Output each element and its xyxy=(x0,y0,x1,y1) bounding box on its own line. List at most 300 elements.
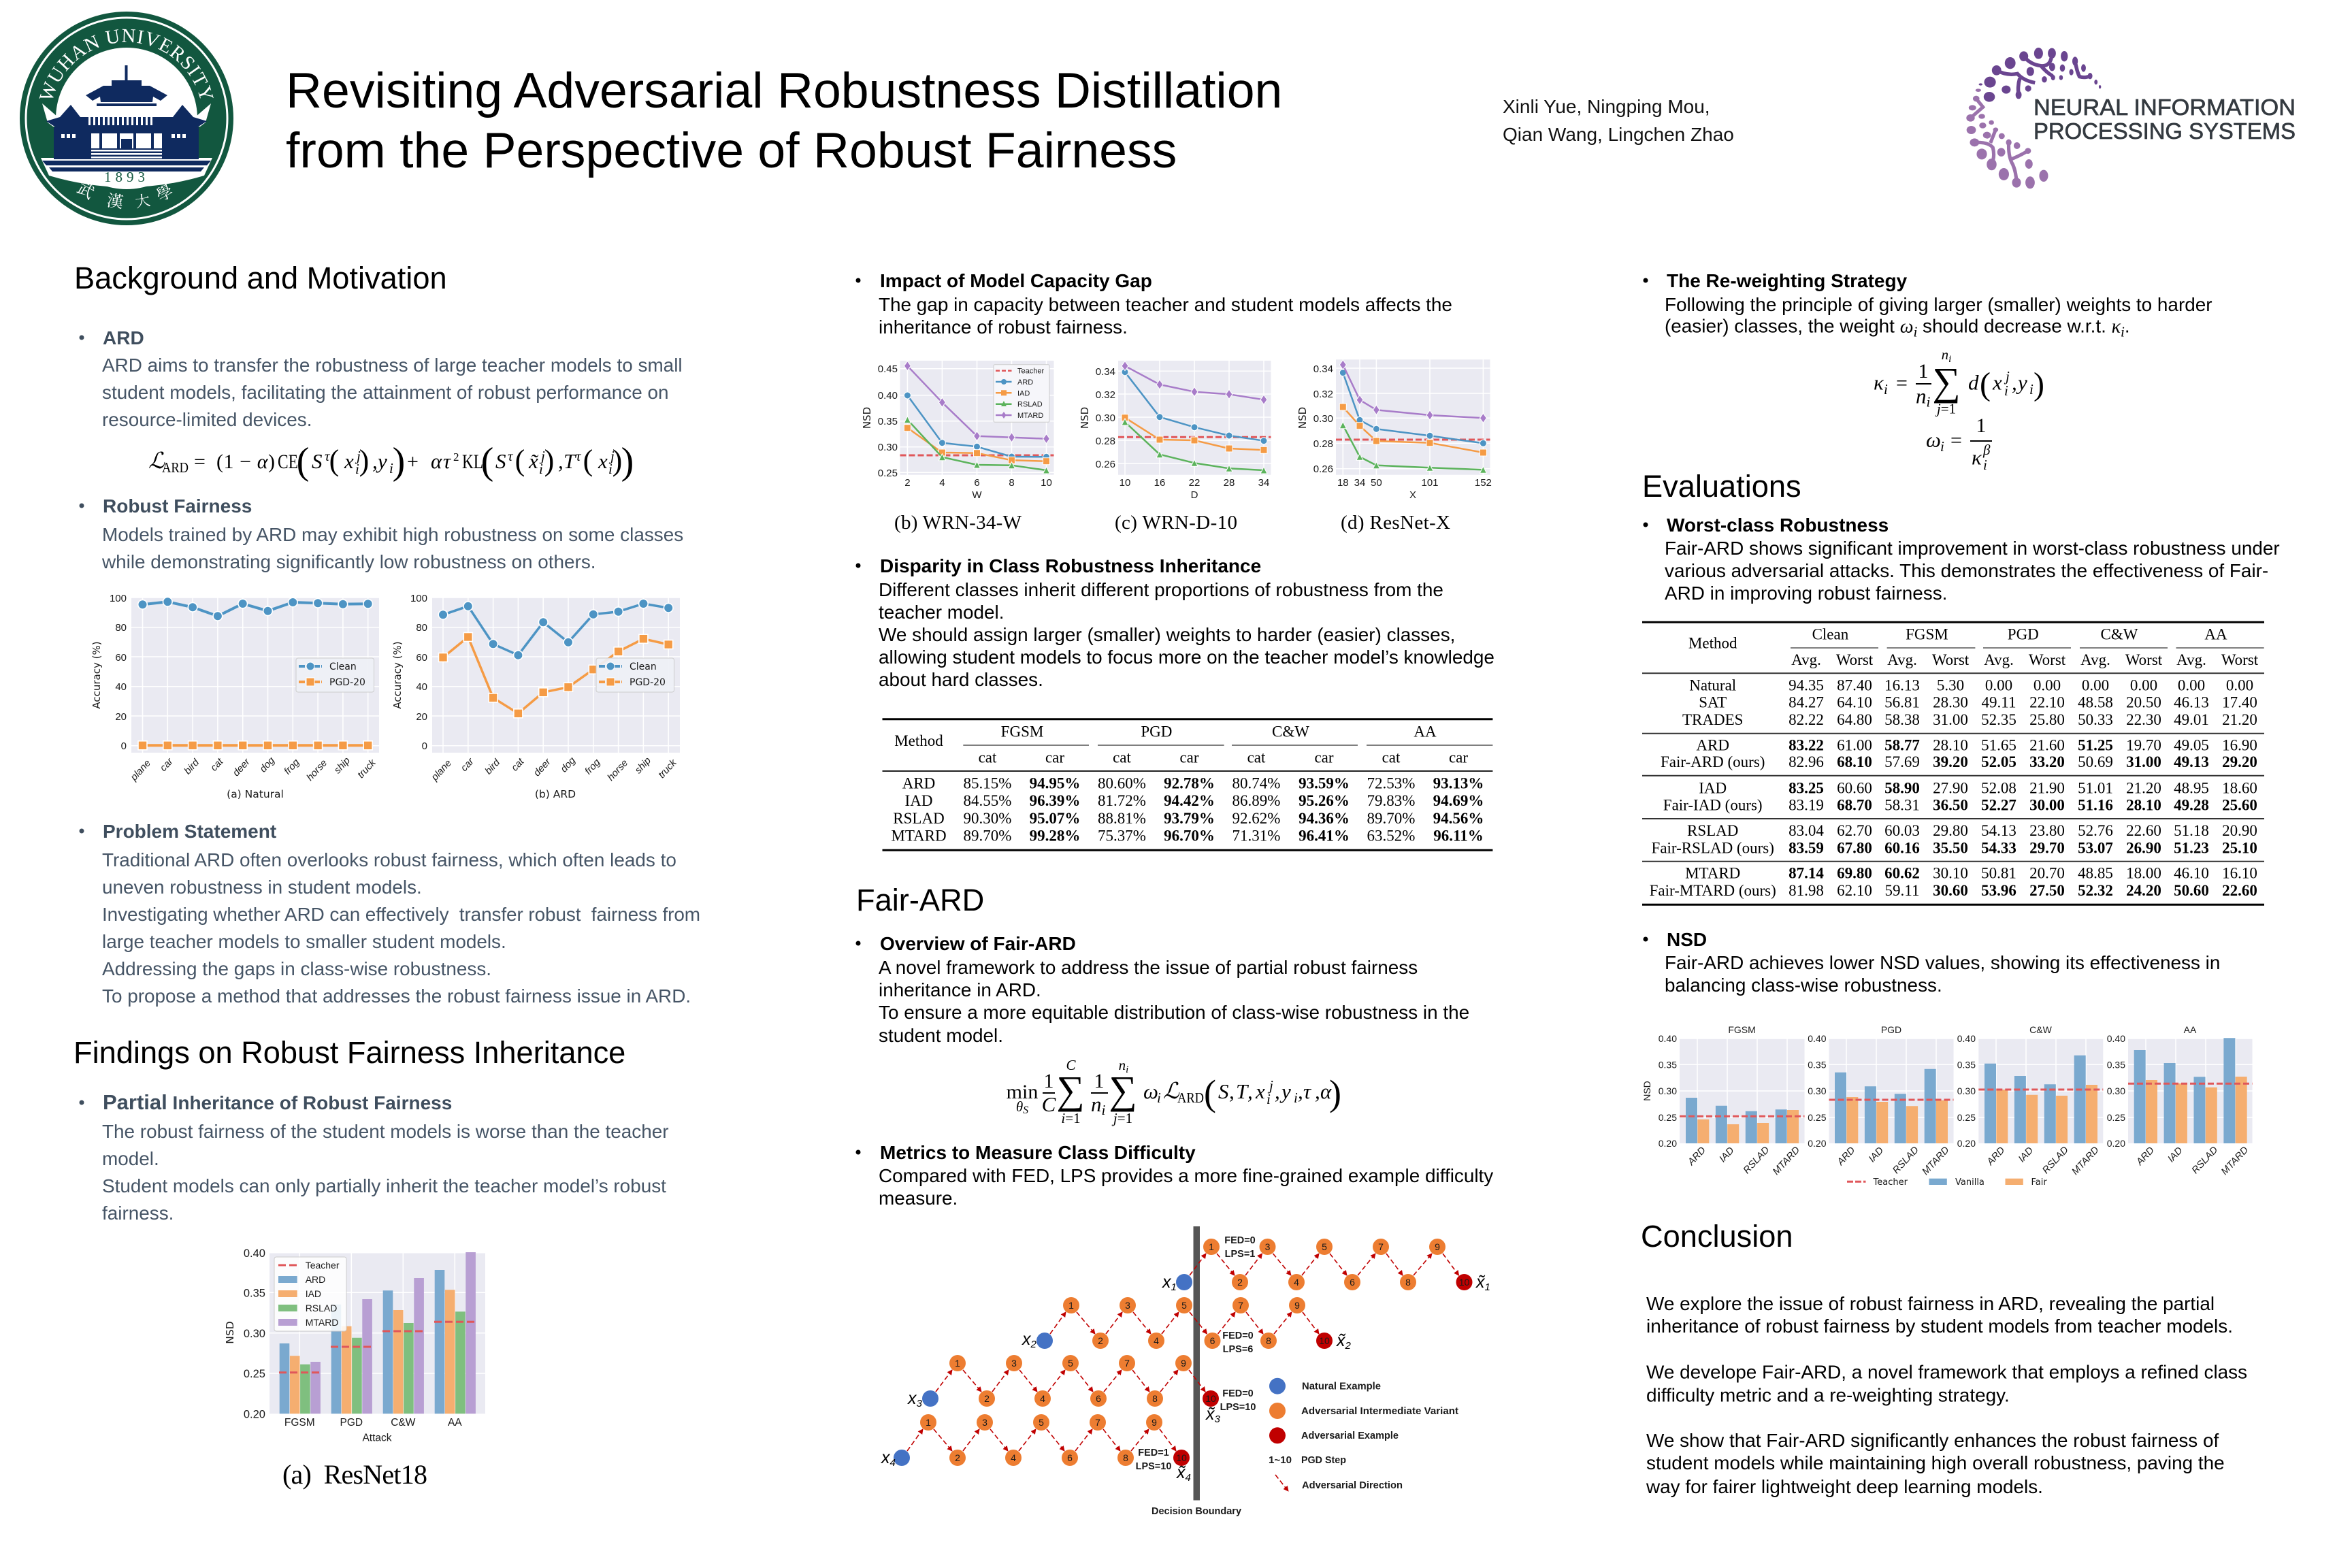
line chart: WRN-34-W: Teacher xyxy=(1017,368,1044,376)
table: worst-class robustness comparison: 64.10 xyxy=(1837,693,1872,710)
table: class-wise robustness inheritance: 95.07% xyxy=(1030,810,1080,827)
table: worst-class robustness comparison: 56.81 xyxy=(1884,693,1920,710)
table: worst-class robustness comparison: 20.70 xyxy=(2029,865,2065,882)
example variable labels: x̃ xyxy=(1337,1331,1345,1350)
table: class-wise robustness inheritance: 94.95% xyxy=(1030,774,1080,791)
tick labels and titles: FGSM xyxy=(1728,1024,1756,1035)
formula: Fair-ARD objective: T xyxy=(1236,1079,1250,1103)
formula: ARD loss: ( xyxy=(481,440,493,483)
logo: Wuhan University seal: 漢 xyxy=(105,187,125,213)
tick labels and titles: RSLAD xyxy=(2190,1145,2220,1176)
tick labels and titles: 0.40 xyxy=(1808,1033,1827,1044)
formula: ARD loss: x xyxy=(598,449,608,473)
line chart: WRN-34-W: 0.45 xyxy=(878,363,898,375)
table: worst-class robustness comparison: 5.30 xyxy=(1937,676,1964,693)
table: worst-class robustness comparison: 82.96 xyxy=(1788,753,1824,770)
formula: kappa and omega: i xyxy=(1948,354,1951,365)
logo: Wuhan University seal: 大 xyxy=(133,189,152,212)
table: worst-class robustness comparison: Fair-IAD (ours) xyxy=(1663,796,1763,813)
block: problem statement: Problem Statement xyxy=(103,821,276,842)
FED and LPS annotations: LPS=10 xyxy=(1136,1461,1171,1472)
table: worst-class robustness comparison: 46.10 xyxy=(2174,865,2209,882)
table: class-wise robustness inheritance: 92.78% xyxy=(1164,774,1215,791)
formula: kappa and omega: , xyxy=(2012,371,2017,395)
line chart: ResNet-X: 0.26 xyxy=(1313,463,1333,475)
step numbers: 4 xyxy=(1040,1393,1045,1404)
bar chart: NSD on ResNet18: C&W xyxy=(391,1417,416,1428)
tick labels and titles: 0.20 xyxy=(2107,1138,2125,1149)
line chart: natural model per-class accuracy: (a) Natural xyxy=(227,788,284,800)
decision boundary label: Decision Boundary xyxy=(1152,1506,1241,1517)
block: disparity text: teacher model. xyxy=(879,602,1004,623)
formula: ARD loss: i xyxy=(608,461,612,477)
block: robust fairness: Robust Fairness xyxy=(103,495,252,517)
tick labels and titles: AA xyxy=(2184,1024,2197,1035)
step numbers: 1 xyxy=(926,1417,931,1428)
example variable labels: x xyxy=(908,1389,916,1408)
decision boundary xyxy=(1194,1226,1200,1500)
step numbers: 2 xyxy=(955,1452,960,1463)
table: worst-class robustness comparison: ARD xyxy=(1696,736,1729,753)
block: overview of Fair-ARD: inheritance in ARD. xyxy=(879,979,1041,1000)
line chart: natural model per-class accuracy: 20 xyxy=(115,711,127,723)
line chart: ResNet-X: 0.28 xyxy=(1313,438,1333,450)
heading: findings: Findings on Robust Fairness Inheritance xyxy=(74,1035,625,1070)
table: class-wise robustness inheritance: C&W xyxy=(1272,723,1309,740)
example variable labels xyxy=(881,1273,1490,1484)
fair bars xyxy=(1697,1077,2247,1143)
tick labels and titles: NSD xyxy=(1642,1081,1652,1101)
table: worst-class robustness comparison: 25.60 xyxy=(2222,796,2257,813)
line chart: ARD model per-class accuracy: bird xyxy=(483,757,503,777)
table: class-wise robustness inheritance: 75.37% xyxy=(1098,828,1146,845)
block: re-weighting text: (easier) classes, the weight ω xyxy=(1665,316,1913,338)
table: worst-class robustness comparison: 33.20 xyxy=(2029,753,2065,770)
formula: Fair-ARD objective: i=1 xyxy=(1061,1110,1081,1126)
block: re-weighting text: The Re-weighting Strategy xyxy=(1667,270,1908,291)
step numbers: 7 xyxy=(1238,1300,1243,1311)
step numbers: 10 xyxy=(1205,1393,1216,1404)
table: worst-class robustness comparison: RSLAD xyxy=(1687,822,1738,839)
title xyxy=(286,63,1282,178)
formula: kappa and omega: j xyxy=(2004,368,2010,385)
table: worst-class robustness comparison: 69.80 xyxy=(1837,865,1872,882)
table: worst-class robustness comparison: 48.58 xyxy=(2078,693,2113,710)
line chart: WRN-D-10: NSD xyxy=(1079,407,1091,429)
line chart: natural model per-class accuracy: 40 xyxy=(115,681,127,693)
line chart: WRN-34-W: 2 xyxy=(904,477,911,489)
table: worst-class robustness comparison: 49.11 xyxy=(1982,693,2016,710)
bar chart: NSD on ResNet18: FGSM xyxy=(284,1417,315,1428)
formula: ARD loss: ) xyxy=(612,444,622,477)
table: worst-class robustness comparison: 0.00 xyxy=(2226,676,2253,693)
table: worst-class robustness comparison: 28.10 xyxy=(2126,796,2161,813)
table: class-wise robustness inheritance: MTARD xyxy=(891,828,947,845)
example variable labels: 4 xyxy=(890,1457,896,1469)
table: worst-class robustness comparison: 16.10 xyxy=(2222,865,2257,882)
step numbers: 10 xyxy=(1176,1452,1187,1463)
formula: kappa and omega: ∑ xyxy=(1932,359,1961,404)
panel: conclusion xyxy=(1641,1219,2247,1497)
line chart: ARD model per-class accuracy: Clean xyxy=(630,662,657,672)
example variable labels: 2 xyxy=(1030,1339,1037,1350)
logo: Wuhan University seal: 武 xyxy=(74,175,99,203)
line chart: ResNet-X: 0.30 xyxy=(1313,413,1333,425)
tick labels and titles: IAD xyxy=(1717,1145,1737,1164)
table: class-wise robustness inheritance: 99.28% xyxy=(1030,828,1080,845)
table: worst-class robustness comparison: 21.20 xyxy=(2126,779,2161,796)
text: conclusion point one: We explore the issue of robust fairness in ARD, revealing the partial xyxy=(1646,1293,2215,1314)
line chart: WRN-34-W: NSD xyxy=(861,407,873,429)
table: worst-class robustness comparison: 20.50 xyxy=(2126,693,2161,710)
table: worst-class robustness comparison: 39.20 xyxy=(1933,753,1968,770)
tick labels and titles: 0.25 xyxy=(1659,1112,1677,1123)
bar chart: NSD on ResNet18: ARD xyxy=(306,1274,325,1285)
authors: Qian Wang, Lingchen Zhao xyxy=(1503,124,1734,145)
formula: kappa and omega: i xyxy=(2029,381,2034,397)
table: worst-class robustness comparison: Avg. xyxy=(1791,651,1821,668)
formula: ARD loss: ) xyxy=(393,440,405,483)
formula: ARD loss: , xyxy=(372,449,378,473)
formula: ARD loss: (1 − α) xyxy=(216,451,275,473)
heading: Fair-ARD: Fair-ARD xyxy=(856,883,984,917)
table: worst-class robustness comparison: Worst xyxy=(2125,651,2163,668)
block: re-weighting text xyxy=(1643,270,2212,340)
panel: fair-ARD xyxy=(856,883,1493,1517)
line chart: WRN-34-W: 8 xyxy=(1009,477,1015,489)
FED and LPS annotations: FED=0 xyxy=(1224,1235,1256,1246)
table: class-wise robustness inheritance: 79.83% xyxy=(1367,792,1415,809)
table: worst-class robustness comparison: 0.00 xyxy=(2178,676,2205,693)
table: worst-class robustness comparison: 82.22 xyxy=(1788,711,1824,728)
line chart: ARD model per-class accuracy: 80 xyxy=(416,622,427,634)
formula: Fair-ARD objective: n xyxy=(1119,1057,1126,1073)
step numbers: 6 xyxy=(1096,1393,1101,1404)
diagram legend: Natural Example xyxy=(1302,1382,1381,1392)
tick labels and titles: MTARD xyxy=(2070,1145,2102,1177)
example variable labels: 4 xyxy=(1186,1472,1191,1484)
step numbers: 4 xyxy=(1154,1335,1159,1346)
formula: Fair-ARD objective: j=1 xyxy=(1111,1110,1132,1126)
table: class-wise robustness inheritance: 89.70% xyxy=(964,828,1011,845)
tick labels and titles: C&W xyxy=(2029,1024,2053,1035)
step numbers: 8 xyxy=(1152,1393,1158,1404)
table: worst-class robustness comparison: SAT xyxy=(1699,693,1727,710)
formula: kappa and omega: 1 xyxy=(1918,360,1929,382)
logo: Wuhan University seal: 學 xyxy=(151,178,177,206)
line chart: ResNet-X: 18 xyxy=(1337,477,1349,489)
formula: kappa and omega: ( xyxy=(1980,366,1991,402)
step numbers: 2 xyxy=(984,1393,990,1404)
text: conclusion point three: way for fairer lightweight deep learning models. xyxy=(1646,1476,2043,1497)
text: conclusion point three: We show that Fair-ARD significantly enhances the robust fairness of xyxy=(1646,1430,2219,1451)
block: disparity text: We should assign larger (smaller) weights to harder (easier) classes, xyxy=(879,624,1455,645)
formula: ARD loss: τ xyxy=(576,448,582,464)
block: re-weighting text: should decrease w.r.t. xyxy=(1917,316,2112,336)
tick labels and titles: 0.25 xyxy=(1808,1112,1827,1123)
block: ARD: ARD aims to transfer the robustness of large teacher models to small xyxy=(102,355,683,376)
block: worst-class robustness: ARD in improving robust fairness. xyxy=(1665,583,1947,604)
line chart: natural model per-class accuracy: ship xyxy=(332,755,353,776)
formula: Fair-ARD objective: C xyxy=(1066,1057,1076,1073)
line chart: WRN-34-W: RSLAD xyxy=(1017,401,1043,409)
table: worst-class robustness comparison: 54.13 xyxy=(1981,822,2016,839)
formula: ARD loss: ( xyxy=(515,444,525,477)
block: re-weighting text: κ xyxy=(2112,316,2121,338)
text: conclusion point two: difficulty metric and a re-weighting strategy. xyxy=(1646,1384,2010,1406)
formula: Fair-ARD objective: j xyxy=(1267,1077,1273,1094)
table: worst-class robustness comparison: 31.00 xyxy=(1933,711,1968,728)
block: partial inheritance: Partial Inheritance of Robust Fairness xyxy=(103,1090,452,1114)
bar chart: NSD on ResNet18: 0.35 xyxy=(244,1288,265,1300)
line chart: natural model per-class accuracy: plane xyxy=(128,758,153,783)
line chart: ARD model per-class accuracy: Accuracy (%) xyxy=(391,641,404,709)
bar chart: NSD on ResNet18: RSLAD xyxy=(306,1303,337,1313)
tick labels and titles: 0.20 xyxy=(1808,1138,1827,1149)
table: worst-class robustness comparison: 30.00 xyxy=(2029,796,2065,813)
formula: Fair-ARD objective: i xyxy=(1267,1091,1271,1107)
example variable labels: 1 xyxy=(1171,1281,1177,1293)
table: worst-class robustness comparison: 0.00 xyxy=(2034,676,2061,693)
formula: Fair-ARD objective: ω xyxy=(1143,1079,1158,1103)
panel: disparity in class robustness inheritance xyxy=(856,555,1494,850)
line chart: ARD model per-class accuracy: dog xyxy=(559,755,578,774)
step numbers: 4 xyxy=(1011,1452,1016,1463)
table: worst-class robustness comparison: 51.65 xyxy=(1981,736,2016,753)
table: worst-class robustness comparison: Fair-RSLAD (ours) xyxy=(1652,839,1774,856)
example variable labels: x̃ xyxy=(1177,1463,1186,1482)
table: worst-class robustness comparison: 57.69 xyxy=(1884,753,1920,770)
formula: kappa and omega: d xyxy=(1968,371,1979,395)
table: class-wise robustness inheritance: ARD xyxy=(902,774,935,791)
panel: background and motivation xyxy=(74,261,700,1007)
formula: Fair-ARD objective: α xyxy=(1320,1079,1332,1103)
block: partial inheritance: The robust fairness of the student models is worse than the teacher xyxy=(102,1121,669,1142)
table: worst-class robustness comparison: 87.40 xyxy=(1837,676,1872,693)
vanilla bars xyxy=(1686,1038,2235,1143)
bar chart: NSD on ResNet18: Teacher xyxy=(306,1260,340,1271)
bar chart: NSD on ResNet18: 0.20 xyxy=(244,1409,265,1421)
text: conclusion point one: inheritance of robust fairness by student models from teacher models. xyxy=(1646,1316,2233,1337)
tick labels and titles: 0.30 xyxy=(2107,1085,2125,1096)
table: class-wise robustness inheritance: cat xyxy=(1113,749,1132,766)
table: class-wise robustness inheritance: 94.56% xyxy=(1433,810,1484,827)
step numbers: 5 xyxy=(1068,1358,1073,1369)
bar chart: NSD on ResNet18: 0.40 xyxy=(244,1247,265,1260)
text: conclusion point two xyxy=(1646,1361,2247,1406)
table: class-wise robustness inheritance: 88.81% xyxy=(1098,810,1146,827)
example variable labels: 1 xyxy=(1485,1281,1490,1293)
table: worst-class robustness comparison: 94.35 xyxy=(1788,676,1824,693)
formula: kappa and omega: i xyxy=(1983,457,1987,473)
line chart: ARD model per-class accuracy: 0 xyxy=(422,740,427,752)
table: class-wise robustness inheritance: car xyxy=(1045,749,1064,766)
table: worst-class robustness comparison: 84.27 xyxy=(1788,693,1824,710)
table: worst-class robustness comparison: 30.10 xyxy=(1933,865,1968,882)
block: disparity text xyxy=(856,555,1494,690)
block: robust fairness xyxy=(79,495,683,572)
step numbers: 6 xyxy=(1350,1277,1355,1288)
line chart: natural model per-class accuracy: cat xyxy=(209,756,226,774)
example variable labels: x̃ xyxy=(1476,1273,1485,1292)
formula: ARD loss: x xyxy=(344,449,354,473)
block: impact text: The gap in capacity between teacher and student models affects the xyxy=(879,294,1452,315)
formula: Fair-ARD objective: ARD xyxy=(1177,1090,1204,1106)
table: worst-class robustness comparison: 36.50 xyxy=(1933,796,1968,813)
chart legend xyxy=(1847,1177,2047,1188)
title: Revisiting Adversarial Robustness Distillation xyxy=(286,63,1282,118)
panel backgrounds and grid xyxy=(1680,1039,2253,1143)
table: worst-class robustness comparison: 87.14 xyxy=(1788,865,1824,882)
tick labels and titles: 0.40 xyxy=(1659,1033,1677,1044)
table: worst-class robustness comparison: 0.00 xyxy=(2130,676,2157,693)
line chart: WRN-D-10: 0.26 xyxy=(1096,459,1115,470)
table: worst-class robustness comparison: 61.00 xyxy=(1837,736,1872,753)
tick labels and titles: 0.40 xyxy=(1957,1033,1976,1044)
table: worst-class robustness comparison: Method xyxy=(1688,635,1737,652)
tick labels and titles: RSLAD xyxy=(2040,1145,2071,1176)
block: re-weighting text: Following the principle of giving larger (smaller) weights to harder xyxy=(1665,294,2212,315)
line chart: WRN-34-W: 6 xyxy=(974,477,980,489)
step numbers: 2 xyxy=(1098,1335,1103,1346)
table: worst-class robustness comparison: 22.60 xyxy=(2222,882,2257,899)
formula: ARD loss: KL xyxy=(462,451,483,473)
formula: ARD loss: , xyxy=(558,449,564,473)
table: worst-class robustness comparison: Fair-MTARD (ours) xyxy=(1650,882,1776,899)
formula: kappa and omega: β xyxy=(1982,442,1991,458)
formula: Fair-ARD objective: 1 xyxy=(1044,1070,1054,1092)
line chart: WRN-D-10: (c) WRN-D-10 xyxy=(1115,512,1237,534)
step numbers: 8 xyxy=(1123,1452,1128,1463)
tick labels and titles: 0.35 xyxy=(1808,1059,1827,1070)
step numbers: 10 xyxy=(1459,1277,1469,1288)
tick labels and titles: IAD xyxy=(2016,1145,2036,1164)
step numbers: 2 xyxy=(1237,1277,1243,1288)
table: worst-class robustness comparison: 50.69 xyxy=(2078,753,2113,770)
table: worst-class robustness comparison: 60.60 xyxy=(1837,779,1872,796)
table: worst-class robustness comparison: 53.07 xyxy=(2078,839,2113,856)
table: worst-class robustness comparison: 29.80 xyxy=(1933,822,1968,839)
formula: Fair-ARD objective: i xyxy=(1157,1090,1161,1106)
bar chart: NSD on ResNet18: Attack xyxy=(362,1433,392,1444)
table: worst-class robustness comparison: 60.03 xyxy=(1884,822,1920,839)
step numbers: 3 xyxy=(1011,1358,1017,1369)
formula: ARD loss: S xyxy=(495,449,506,473)
table: worst-class robustness comparison: IAD xyxy=(1699,779,1727,796)
table: worst-class robustness comparison: 17.40 xyxy=(2222,693,2257,710)
text: conclusion point two: We develope Fair-ARD, a novel framework that employs a refined class xyxy=(1646,1361,2247,1383)
formula: kappa and omega: i xyxy=(1940,438,1944,455)
table: worst-class robustness comparison: 21.90 xyxy=(2029,779,2065,796)
logo: Neural Information Processing Systems: PROCESSING SYSTEMS xyxy=(2034,119,2296,144)
formula: kappa and omega: = xyxy=(1896,372,1908,395)
formula: Fair-ARD objective: , xyxy=(1315,1079,1320,1103)
formula: ARD loss: j xyxy=(355,448,361,464)
table: class-wise robustness inheritance: 72.53% xyxy=(1367,774,1415,791)
title: from the Perspective of Robust Fairness xyxy=(286,122,1177,178)
formula: Fair-ARD objective: y xyxy=(1279,1079,1291,1103)
table: worst-class robustness comparison: Clean xyxy=(1812,625,1849,642)
table: class-wise robustness inheritance: 94.36% xyxy=(1298,810,1350,827)
line chart: natural model per-class accuracy: 100 xyxy=(110,593,127,604)
formula: ARD loss: ( xyxy=(329,444,339,477)
table: worst-class robustness comparison: 59.11 xyxy=(1885,882,1919,899)
line chart: ARD model per-class accuracy: deer xyxy=(532,756,554,779)
table: class-wise robustness inheritance: IAD xyxy=(905,792,932,809)
formula: kappa and omega: ω xyxy=(1926,428,1941,452)
line chart: WRN-D-10: 0.28 xyxy=(1096,436,1115,447)
line chart: ARD model per-class accuracy: truck xyxy=(656,757,679,781)
table: class-wise robustness inheritance: FGSM xyxy=(1001,723,1043,740)
table: worst-class robustness comparison: 25.80 xyxy=(2029,711,2065,728)
example variable labels: x̃ xyxy=(1206,1405,1214,1424)
diagram legend: PGD Step xyxy=(1301,1455,1346,1466)
formula: kappa and omega: ) xyxy=(2034,366,2044,402)
table: worst-class robustness comparison: 26.90 xyxy=(2126,839,2161,856)
formula: ARD loss: j xyxy=(608,448,615,464)
formula: ARD loss: ) xyxy=(621,440,634,483)
block: ARD xyxy=(79,327,683,430)
table: worst-class robustness comparison: 0.00 xyxy=(1985,676,2012,693)
step numbers: 1 xyxy=(1209,1241,1214,1252)
table: worst-class robustness comparison: 22.10 xyxy=(2029,693,2065,710)
bar chart: NSD on ResNet18: (a) ResNet18 xyxy=(282,1459,427,1490)
bar chart: NSD on ResNet18: 0.30 xyxy=(244,1328,265,1340)
formula: kappa and omega: y xyxy=(2016,371,2027,395)
tick labels and titles: PGD xyxy=(1881,1024,1901,1035)
formula: Fair-ARD objective: i xyxy=(1126,1064,1128,1075)
tick labels and titles: 0.25 xyxy=(1957,1112,1976,1123)
table: class-wise robustness inheritance: 89.70% xyxy=(1367,810,1415,827)
bar chart: NSD on ResNet18: MTARD xyxy=(306,1317,338,1328)
table: worst-class robustness comparison xyxy=(1642,622,2264,904)
step numbers: 7 xyxy=(1095,1417,1100,1428)
line chart: ResNet-X: NSD xyxy=(1296,407,1309,429)
line chart: WRN-34-W: 0.30 xyxy=(878,442,898,453)
line chart: natural model per-class accuracy: Accuracy (%) xyxy=(91,641,103,709)
step numbers: 4 xyxy=(1294,1277,1299,1288)
formula: ARD loss: y xyxy=(376,449,387,473)
table: worst-class robustness comparison: TRADES xyxy=(1682,711,1743,728)
table: worst-class robustness comparison: 53.96 xyxy=(1981,882,2016,899)
tick labels and titles xyxy=(1642,1024,2251,1177)
block: overview of Fair-ARD: A novel framework to address the issue of partial robust fairness xyxy=(879,957,1418,978)
table: worst-class robustness comparison: 52.27 xyxy=(1981,796,2016,813)
tick labels and titles: 0.35 xyxy=(1659,1059,1677,1070)
table: worst-class robustness comparison: 24.20 xyxy=(2126,882,2161,899)
FED and LPS annotations xyxy=(1136,1235,1256,1472)
formula: Fair-ARD objective: C xyxy=(1042,1092,1056,1116)
tick labels and titles: MTARD xyxy=(1920,1145,1952,1177)
line chart: natural model per-class accuracy: frog xyxy=(282,757,301,777)
example variable labels: 3 xyxy=(916,1398,923,1409)
adversarial direction arrows xyxy=(907,1254,1459,1451)
formula: ARD loss: T xyxy=(564,449,577,473)
formula: kappa and omega: i xyxy=(2004,382,2008,399)
line chart: WRN-D-10: 34 xyxy=(1258,477,1269,489)
chart legend: Vanilla xyxy=(1955,1177,1984,1188)
block: impact text: Impact of Model Capacity Gap xyxy=(880,270,1152,291)
intermediate variant nodes xyxy=(920,1239,1446,1466)
table: worst-class robustness comparison: 83.04 xyxy=(1788,822,1824,839)
formula: kappa and omega xyxy=(1874,346,2044,473)
table: worst-class robustness comparison: 21.60 xyxy=(2029,736,2065,753)
example variable labels: x xyxy=(1022,1330,1030,1349)
table: worst-class robustness comparison: 62.70 xyxy=(1837,822,1872,839)
line chart: natural model per-class accuracy: truck xyxy=(355,757,378,781)
table: worst-class robustness comparison: Worst xyxy=(2221,651,2259,668)
step numbers: 1 xyxy=(1068,1300,1074,1311)
